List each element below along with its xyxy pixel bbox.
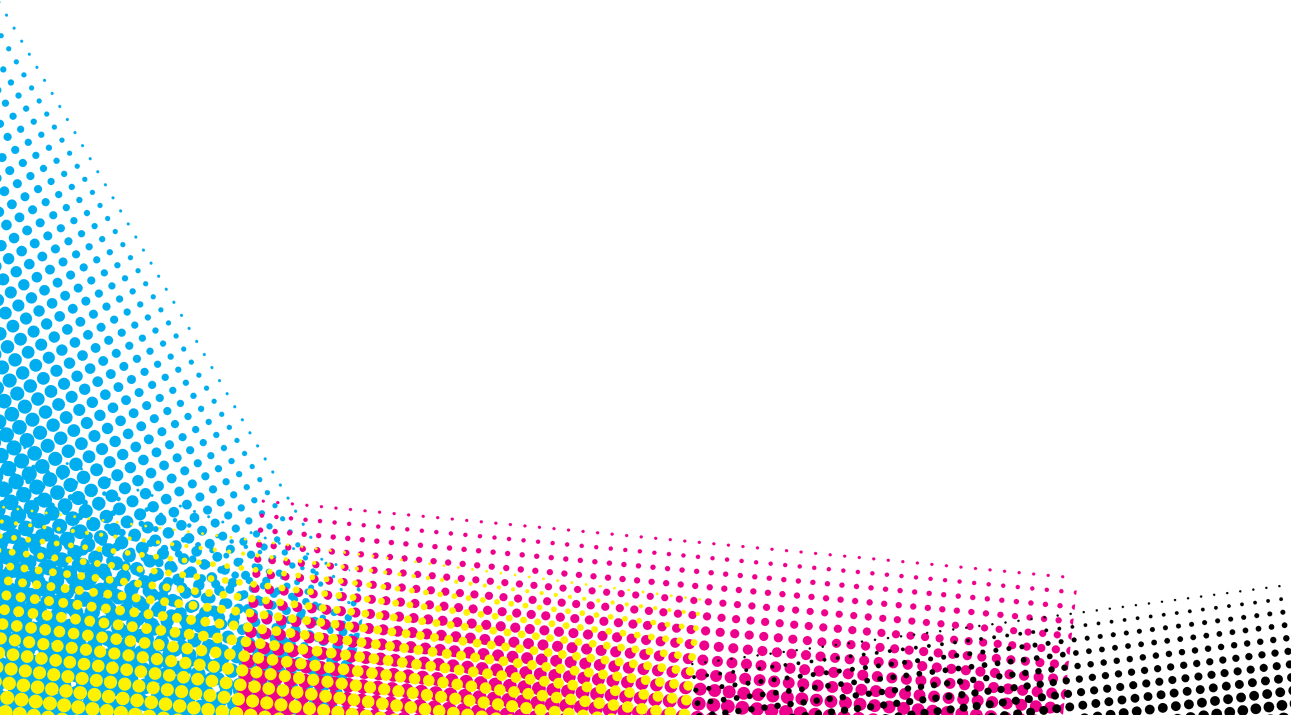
halftone layer: second cyan screen at lower left (0, 442, 362, 715)
halftone layer: magenta band (236, 500, 1077, 715)
halftone layer: yellow band (0, 506, 702, 715)
halftone layer: cyan diagonal wedge (0, 1, 358, 715)
halftone layer: black band at lower right (691, 584, 1291, 715)
